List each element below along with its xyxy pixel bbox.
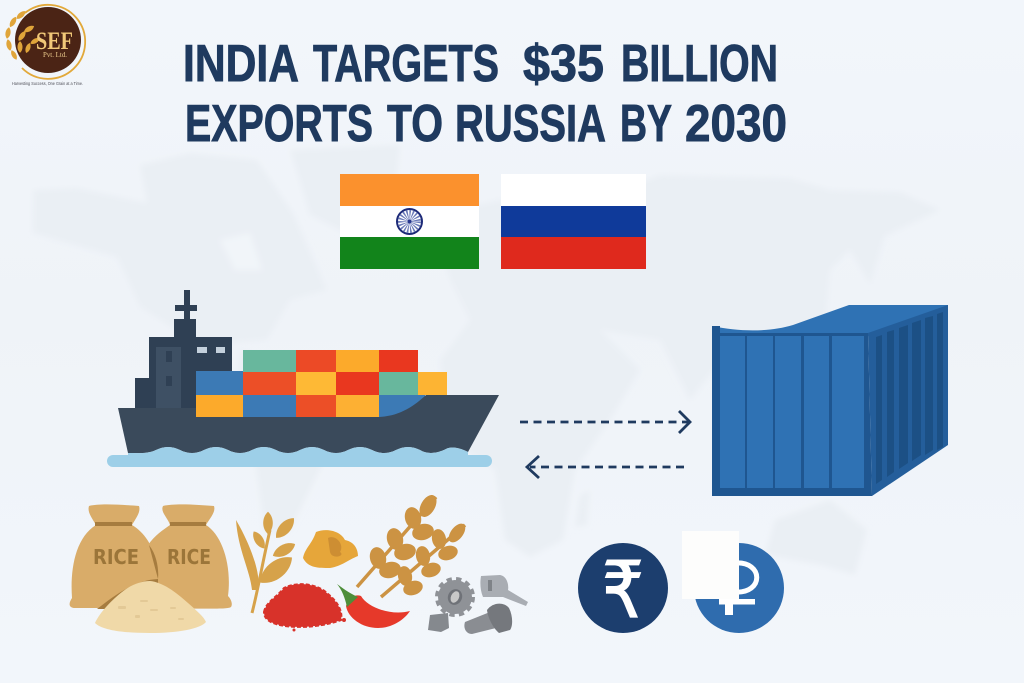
turmeric bbox=[303, 530, 358, 568]
title line 2: EXPORTS bbox=[185, 95, 373, 153]
wheat bbox=[357, 492, 469, 598]
title line 2: RUSSIA bbox=[455, 95, 606, 153]
shipping container bbox=[712, 305, 948, 496]
title line 1 bbox=[183, 35, 778, 93]
rice plant bbox=[236, 512, 298, 613]
title line 2: 2030 bbox=[685, 95, 787, 153]
bracket bbox=[480, 575, 528, 606]
waves bbox=[128, 447, 468, 456]
flag: India bbox=[340, 174, 479, 269]
chili powder bbox=[264, 584, 346, 632]
gear bbox=[438, 580, 472, 614]
machine parts bbox=[428, 575, 528, 634]
white patch bbox=[682, 531, 739, 599]
title line 1: TARGETS bbox=[313, 35, 499, 93]
cargo ship bbox=[107, 290, 499, 467]
sack shadow bbox=[97, 545, 158, 609]
logo wheat bbox=[4, 9, 41, 61]
hull bbox=[118, 395, 499, 453]
label left: RICE bbox=[93, 545, 139, 569]
windows bbox=[197, 347, 207, 353]
title line 1: INDIA bbox=[183, 35, 299, 93]
title line 2 bbox=[185, 95, 787, 153]
logo name: SEF bbox=[36, 28, 73, 55]
container panels bbox=[720, 336, 864, 488]
nut bbox=[428, 613, 449, 632]
sack left bbox=[70, 504, 157, 608]
rupee coin bbox=[578, 543, 668, 635]
world map watermark bbox=[33, 145, 940, 575]
ruble symbol bbox=[719, 563, 757, 615]
ruble coin bbox=[694, 543, 784, 633]
flag: Russia bbox=[501, 174, 646, 269]
sack right bbox=[148, 504, 232, 609]
logo ring bbox=[22, 5, 85, 79]
logo tagline: Harvesting Success, One Grain at a Time. bbox=[12, 81, 83, 86]
chakra bbox=[397, 209, 422, 234]
logo sub: Pvt. Ltd. bbox=[43, 50, 67, 59]
containers bbox=[196, 350, 447, 418]
title line 1: BILLION bbox=[621, 35, 778, 93]
label right: RICE bbox=[167, 545, 211, 569]
title line 2: TO bbox=[387, 95, 443, 153]
rice pile bbox=[95, 581, 206, 633]
superstructure bbox=[135, 290, 232, 412]
logo disc bbox=[15, 7, 81, 73]
container side ribs bbox=[876, 312, 943, 484]
bolt bbox=[464, 604, 512, 634]
arrow: import bbox=[527, 456, 684, 478]
container top bbox=[712, 305, 948, 336]
title line 1: $35 bbox=[523, 35, 604, 93]
logo bbox=[4, 5, 85, 86]
rice sacks bbox=[70, 504, 232, 633]
arrow: export bbox=[520, 411, 690, 433]
water bbox=[107, 455, 492, 467]
container front frame bbox=[712, 326, 872, 496]
bay bbox=[220, 233, 262, 270]
title line 2: BY bbox=[620, 95, 672, 153]
title bbox=[183, 35, 787, 153]
chili pepper bbox=[337, 584, 410, 628]
container side bbox=[868, 305, 948, 496]
rupee symbol: ₹ bbox=[602, 544, 644, 635]
